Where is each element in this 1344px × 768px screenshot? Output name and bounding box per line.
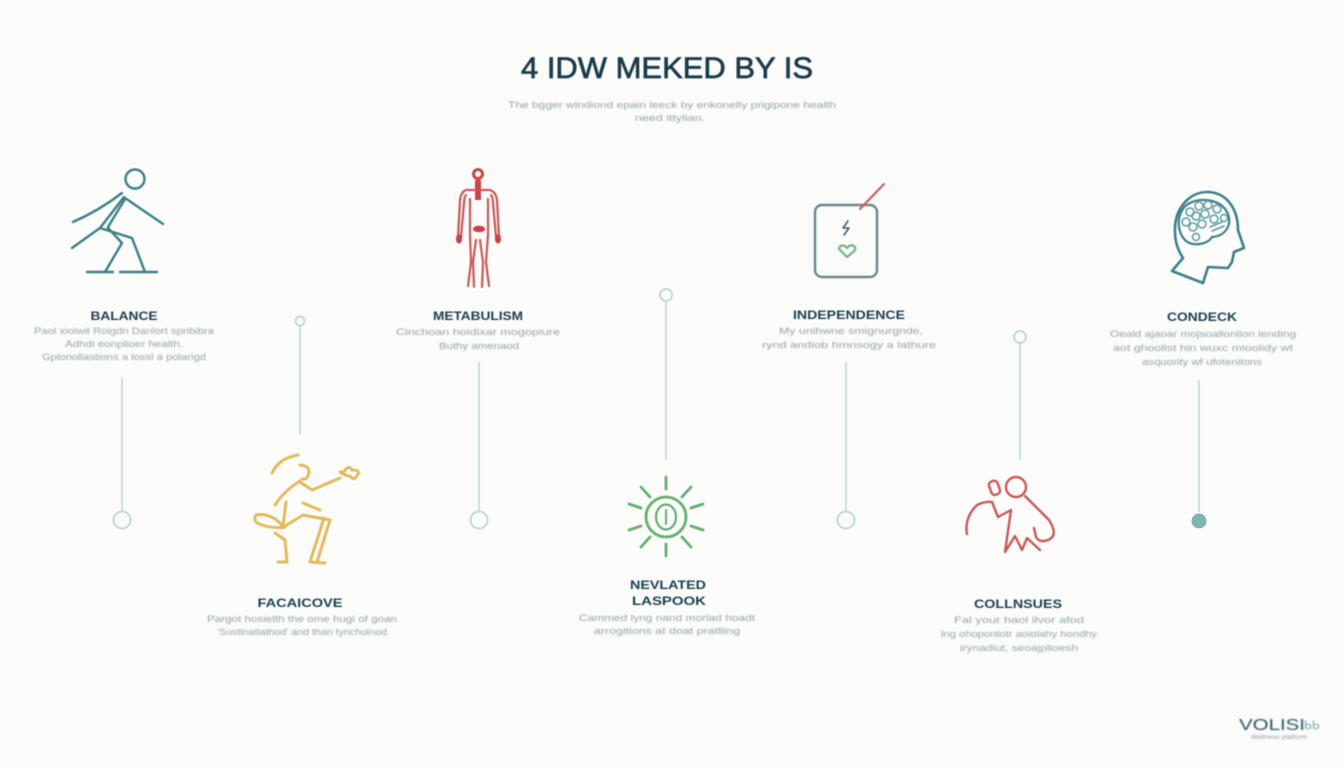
description: balance: Paol xiolwit Roigdn Danlort spribibra: [34, 326, 215, 337]
heading: elevated outlook: [630, 578, 706, 608]
description: balance: Gplonollastions a lossl a polarigd: [42, 352, 206, 363]
connector: balance: [114, 377, 130, 528]
subtitle: need ittylian.: [635, 113, 705, 124]
heading: collnsues: COLLNSUES: [974, 597, 1062, 611]
description: independence: rynd andiob hmnsogy a lathure: [762, 340, 936, 351]
description: metabolism: Buthy amenaod: [439, 341, 519, 352]
heading: metabolism: METABULISM: [433, 309, 523, 323]
icon: device card: [815, 184, 884, 277]
description: condeck: Oeald ajaoar mojsoallonlion lending: [1110, 329, 1296, 340]
connector: collnsues: [1014, 331, 1026, 460]
description: condeck: asquority wf ufotenitons: [1142, 357, 1262, 368]
connector: facaicove: [296, 316, 304, 435]
icon: head with brain: [1172, 192, 1244, 283]
heading: facaicove: FACAICOVE: [258, 596, 342, 610]
heading: elevated outlook: LASPOOK: [632, 594, 706, 608]
description: independence: [762, 326, 936, 351]
panel: facaicove: [207, 316, 397, 638]
connector: metabolism: [470, 362, 488, 528]
logo: [1239, 717, 1320, 741]
panel: independence: [762, 184, 936, 528]
heading: independence: INDEPENDENCE: [793, 308, 905, 322]
description: metabolism: Cinchoan hoidixar mogopiure: [396, 327, 560, 338]
panel: condeck: [1110, 192, 1296, 528]
panel: elevated outlook: [579, 289, 755, 637]
title: 4 IDW MEKED BY IS: [521, 52, 813, 85]
panel: balance: [34, 170, 215, 528]
logo: ЬЬ: [1304, 718, 1320, 732]
description: facaicove: Pargot hosielth the ome hugi of goan: [207, 614, 397, 625]
icon: red body figure: [457, 170, 500, 287]
connector: condeck: [1192, 380, 1206, 528]
panel: metabolism: [396, 170, 560, 528]
heading: balance: BALANCE: [90, 309, 158, 323]
icon: green sun: [629, 477, 703, 556]
description: elevated outlook: Cammed lyng nand morlad hoadt: [579, 613, 755, 624]
icon: red figure: [966, 477, 1054, 552]
description: elevated outlook: [579, 613, 755, 637]
description: metabolism: [396, 327, 560, 352]
description: balance: Adhdi eonplioer health.: [65, 339, 183, 350]
subtitle: [508, 100, 836, 124]
description: collnsues: Fal your haol ilvor afod: [954, 615, 1084, 626]
subtitle: The bgger windiond epain leeck by enkonelly prigipone health: [508, 100, 836, 111]
description: collnsues: irynadiut, seoajplioesh: [960, 643, 1078, 654]
icon: yellow figure: [255, 455, 358, 563]
description: facaicove: [207, 614, 397, 638]
description: balance: [34, 326, 215, 363]
logo: Wellness platform: [1251, 734, 1307, 741]
connector: independence: [838, 362, 854, 528]
logo: VOLISI: [1239, 717, 1305, 734]
panel: collnsues: [941, 331, 1097, 654]
heading: elevated outlook: NEVLATED: [630, 578, 706, 592]
heading: condeck: CONDECK: [1167, 310, 1237, 324]
description: facaicove: 'Sustinatlathod' and than tynchuinod: [217, 627, 387, 638]
description: collnsues: [941, 615, 1097, 654]
description: condeck: [1110, 329, 1296, 368]
connector: elevated outlook: [660, 289, 672, 460]
description: condeck: aot ghoolist hin wuxc mioolidy wt: [1113, 343, 1293, 354]
description: elevated outlook: arrogitions at doat pratlling: [594, 626, 740, 637]
description: independence: My unihwne smignurgnde,: [779, 326, 923, 337]
description: collnsues: lng ohopontotr aoiolahy hondhy: [941, 629, 1097, 640]
icon: balancing figure: [72, 170, 163, 272]
